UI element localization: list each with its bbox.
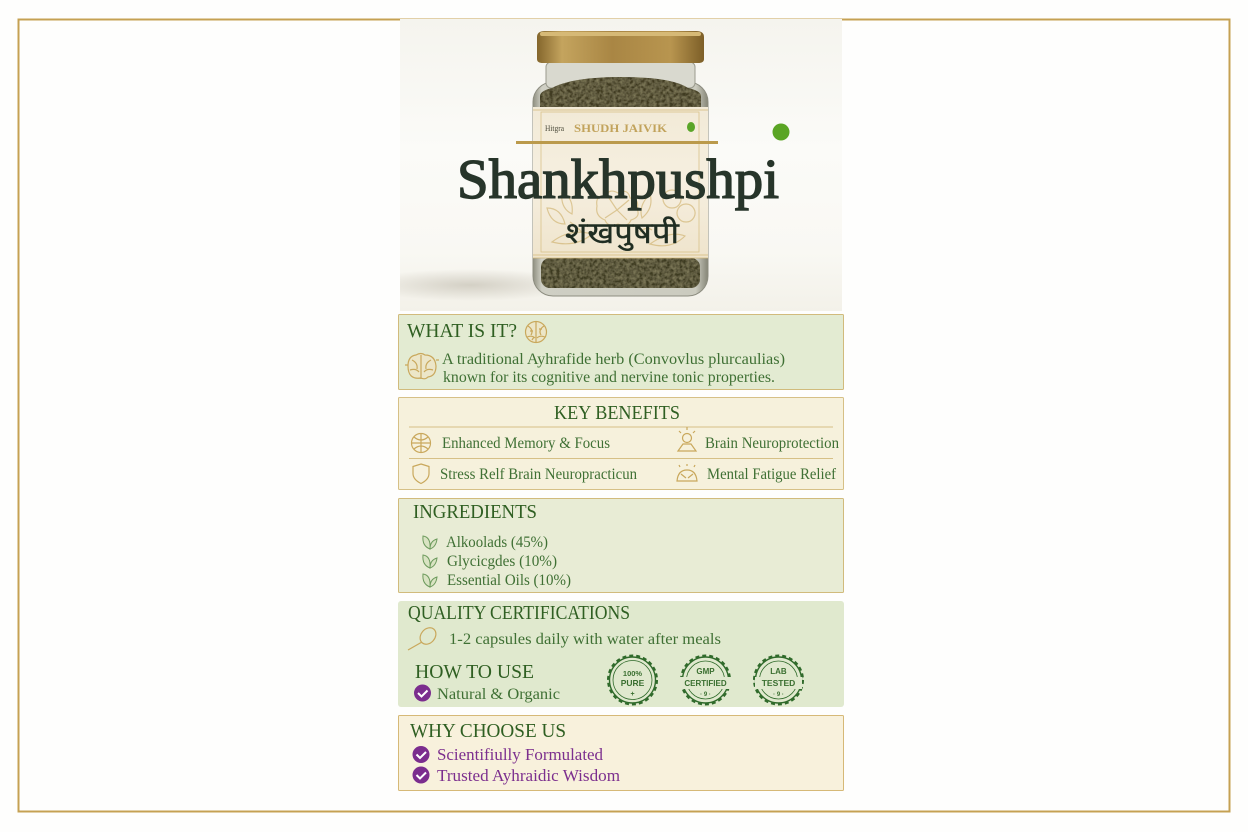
benefit: stress: Stress Relf Brain Neuropracticun [440, 466, 637, 483]
badge: gmp certified: · 9 · [700, 692, 711, 698]
icon: check [414, 684, 431, 702]
badge: pure: PURE [621, 678, 645, 688]
description text: A traditional Ayhrafide herb (Convovlus plurcaulias) [442, 351, 785, 368]
gold rule [516, 141, 718, 144]
icon: fatigue [677, 464, 697, 481]
badge: gmp certified: CERTIFIED [684, 679, 727, 688]
jar: Hitgra [545, 124, 564, 133]
reason: ayurvedic wisdom: Trusted Ayhraidic Wisdom [437, 766, 620, 785]
badge: pure: + [630, 691, 635, 698]
badge: gmp certified: GMP [696, 667, 715, 676]
icon: check [412, 766, 430, 784]
panel: why choose us [398, 716, 844, 790]
badge: lab tested: · 9 · [773, 692, 784, 698]
panel: what is it [398, 314, 844, 390]
hero: product photo [360, 19, 842, 311]
heading: quality certifications: QUALITY CERTIFICATIONS [408, 602, 630, 624]
description text: known for its cognitive and nervine tonic properties. [443, 369, 775, 386]
title: Shankhpushpi [457, 149, 779, 211]
panel: quality certifications and how to use [398, 601, 844, 707]
ingredient: alkaloids: Alkoolads (45%) [446, 534, 548, 551]
dosage text: 1-2 capsules daily with water after meals [449, 631, 721, 648]
heading: what is it: WHAT IS IT? [407, 320, 517, 342]
heading: key benefits: KEY BENEFITS [554, 402, 680, 424]
icon: check [412, 746, 430, 763]
subtitle: Devanagari: शंखपुषपी [565, 216, 680, 251]
heading: how to use: HOW TO USE [415, 661, 534, 683]
badge: gmp certified [679, 656, 732, 704]
badge: lab tested [754, 656, 803, 704]
description text [442, 351, 785, 386]
badge: pure: 100% [623, 669, 642, 678]
jar: SHUDH JAIVIK [574, 121, 668, 135]
benefit: fatigue: Mental Fatigue Relief [707, 466, 837, 483]
panel: ingredients [398, 498, 844, 592]
panel: key benefits [398, 398, 844, 490]
icon: shield [413, 464, 429, 484]
ingredient: essential oils: Essential Oils (10%) [447, 572, 571, 589]
natural and organic: Natural & Organic [437, 686, 560, 703]
icon: spoon [408, 625, 439, 650]
icon: neuroprotection [678, 427, 696, 451]
badge: lab tested: TESTED [762, 678, 795, 688]
icon: brain small [526, 322, 546, 342]
heading: ingredients: INGREDIENTS [413, 501, 537, 523]
icon: brain large [405, 354, 439, 379]
icon: memory [412, 434, 430, 452]
green dot [772, 124, 790, 140]
jar [533, 31, 708, 296]
heading: why choose us: WHY CHOOSE US [410, 720, 566, 742]
badge: pure [608, 656, 657, 704]
reason: scientifically formulated: Scientifiully Formulated [437, 745, 603, 764]
benefit: memory: Enhanced Memory & Focus [442, 435, 610, 452]
ingredient: glycosides: Glycicgdes (10%) [447, 553, 557, 570]
botanical line art [547, 190, 695, 246]
badge: lab tested: LAB [770, 667, 787, 676]
benefit: neuroprotection: Brain Neuroprotection [705, 435, 839, 452]
